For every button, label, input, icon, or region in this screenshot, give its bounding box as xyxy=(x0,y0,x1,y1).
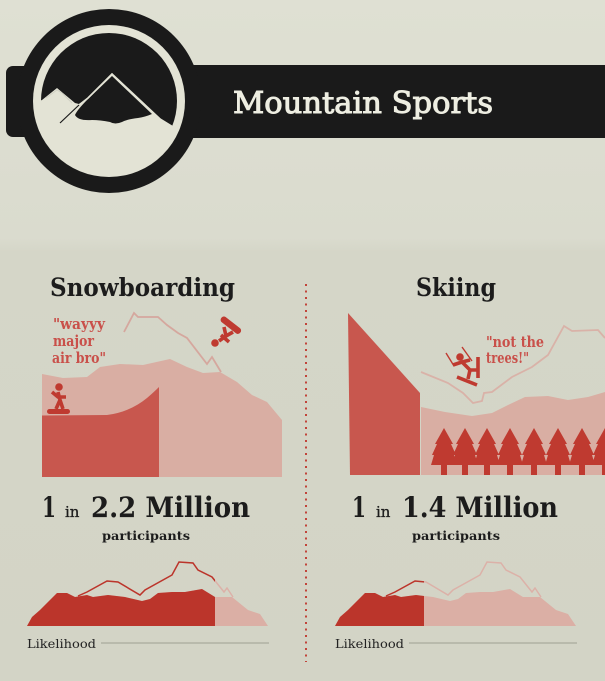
icon: trees xyxy=(431,428,605,475)
heading: snowboarding: Snowboarding xyxy=(50,273,235,302)
quote: wayyy major air bro xyxy=(52,316,106,367)
stat: snowboarding odds: 2.2 Million xyxy=(91,491,250,524)
chart: skiing likelihood xyxy=(335,562,577,651)
quote: wayyy major air bro: "wayyy xyxy=(53,316,106,333)
quote: not the trees: "not the xyxy=(486,334,544,351)
quote: wayyy major air bro: major xyxy=(53,333,94,350)
label: participants: participants xyxy=(412,528,500,543)
heading: skiing: Skiing xyxy=(416,273,496,302)
axis label: Likelihood xyxy=(27,637,96,651)
icon: airborne snowboarder xyxy=(211,315,242,347)
icon: falling skier xyxy=(446,347,478,385)
stat: skiing odds: in xyxy=(376,503,391,521)
chart: snowboarding likelihood xyxy=(27,562,269,651)
title: Mountain Sports xyxy=(233,86,493,121)
header banner xyxy=(6,9,605,193)
quote: not the trees xyxy=(486,334,544,367)
stat: snowboarding odds: 1 xyxy=(42,491,56,524)
quote: not the trees: trees!" xyxy=(486,350,529,367)
stat: skiing odds: 1.4 Million xyxy=(402,491,558,524)
divider: dotted line xyxy=(305,284,307,662)
panel: snowboarding xyxy=(42,273,282,477)
mountain outline xyxy=(421,326,605,403)
pale mountain xyxy=(42,359,282,477)
icon: snowboarder on ramp xyxy=(47,383,70,414)
axis label: Likelihood xyxy=(335,637,404,651)
slope xyxy=(348,313,420,475)
halfpipe ramp xyxy=(42,387,159,477)
pale mountain xyxy=(421,392,605,475)
icon: mountain badge xyxy=(30,25,190,177)
stat: skiing odds: 1 xyxy=(352,491,366,524)
panel: skiing xyxy=(348,273,605,475)
label: participants: participants xyxy=(102,528,190,543)
mountain outline xyxy=(124,313,221,372)
stat: snowboarding odds: in xyxy=(65,503,80,521)
quote: wayyy major air bro: air bro" xyxy=(52,350,106,367)
